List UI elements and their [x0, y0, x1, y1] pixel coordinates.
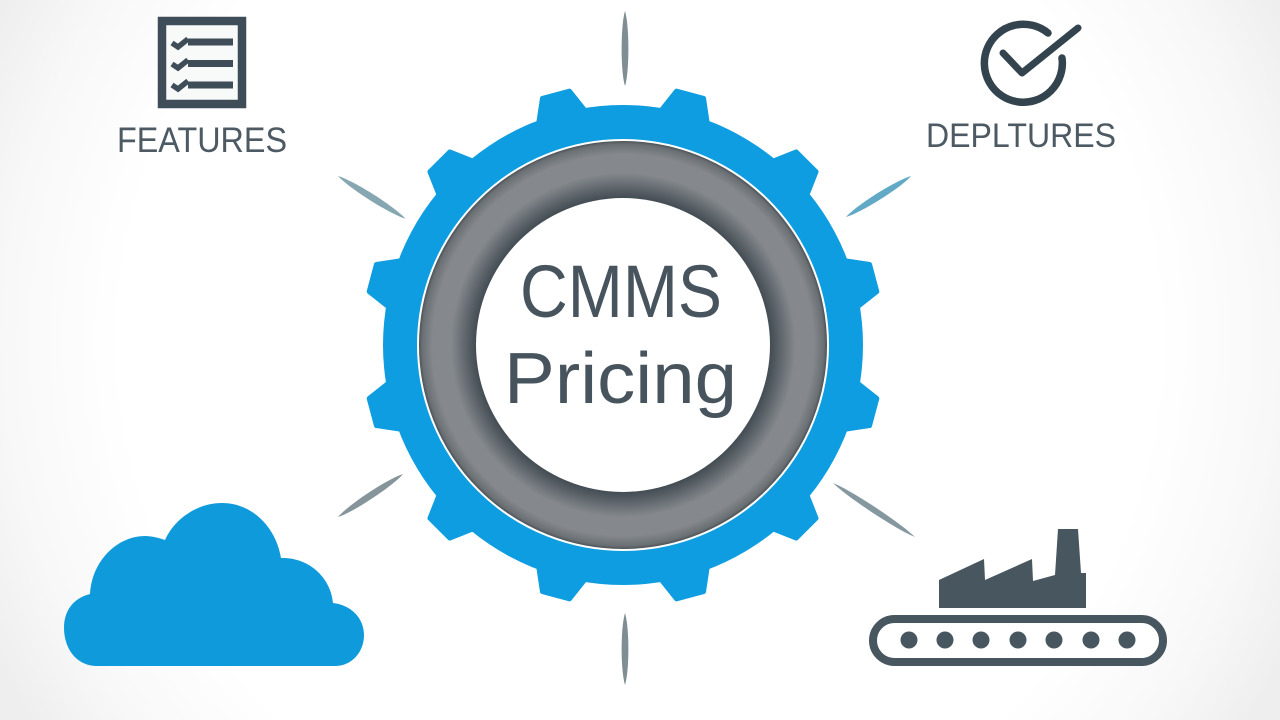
- spoke: lower left: [336, 471, 405, 520]
- conveyor rollers: [900, 632, 1136, 648]
- spoke: lower right: [831, 480, 916, 539]
- title line: Pricing: Pricing: [504, 339, 737, 419]
- spoke: upper left: [336, 173, 407, 222]
- gear body: [383, 105, 863, 585]
- gear teeth: [367, 89, 879, 601]
- spoke: bottom: [622, 613, 628, 685]
- icon: features checklist: [162, 21, 242, 104]
- checklist frame: [162, 21, 242, 104]
- label: deployments: DEPLTURES: [926, 117, 1116, 155]
- icon: check circle: [984, 24, 1078, 102]
- central gear: [367, 89, 879, 601]
- checklist rows: [172, 39, 233, 89]
- spoke: upper right: [844, 173, 913, 220]
- title line: CMMS: CMMS: [520, 250, 722, 333]
- white hub: [476, 198, 770, 492]
- icon: cloud: [64, 503, 364, 666]
- icon: factory on conveyor: [873, 529, 1163, 662]
- title: [504, 250, 737, 419]
- spoke: top: [622, 11, 628, 86]
- conveyor belt: [873, 619, 1163, 662]
- gray ring: [418, 140, 828, 550]
- factory: [939, 529, 1086, 608]
- label: features: FEATURES: [117, 121, 287, 160]
